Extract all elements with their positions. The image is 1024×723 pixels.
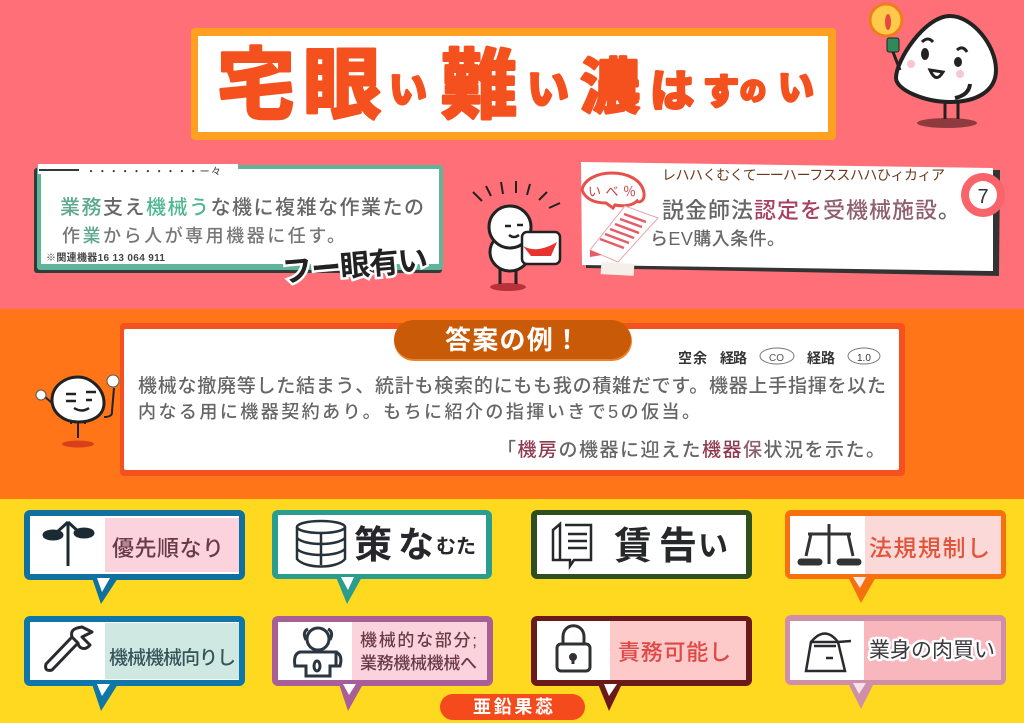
title banner: 難: [441, 44, 517, 129]
panel: example answer: 内なる用に機器契約あり。もちに紹介の指揮いきで5の仮当。: [138, 402, 700, 422]
card: wrench: 機械機械向りし: [109, 647, 236, 669]
example tag row: 空余: [678, 350, 707, 366]
card: robot: 業務機械機械へ: [360, 654, 477, 673]
icon: red speech bubble: [582, 173, 644, 208]
badge: number: [961, 173, 1005, 217]
card: padlock: [531, 616, 752, 711]
footer pill: [440, 694, 585, 720]
title banner: い: [778, 67, 814, 108]
card: robot: [272, 616, 493, 711]
left note footnote: ※関連機器16 13 064 911: [46, 251, 165, 264]
right note header: レハハくむくて一ーハーフススハハひィカィア: [662, 167, 945, 183]
left note header: ・・・・・・・・・・ー々: [86, 166, 221, 178]
example tag row: [678, 348, 880, 366]
title banner: す: [703, 71, 739, 112]
card: document: い: [698, 530, 728, 563]
icon: robot: [295, 628, 341, 676]
icon: wrench: [46, 627, 92, 670]
title banner: は: [650, 67, 694, 116]
card: balance scale: [785, 510, 1006, 603]
example tag row: 経路: [807, 350, 835, 366]
left note body text: 業務支え機械うな機に複雑な作業たの: [60, 196, 424, 219]
footer pill: 亜鉛果蕊: [473, 697, 553, 717]
card: document: [531, 510, 752, 579]
card: database: むた: [436, 535, 476, 558]
card: document: 賃: [614, 526, 652, 568]
card: document: 告: [659, 526, 697, 568]
card: database: 策: [354, 525, 392, 567]
icon: signpost: [44, 522, 93, 566]
panel: left intro note: [34, 164, 443, 289]
icon: document: [553, 524, 591, 566]
panel: example answer: [120, 320, 905, 476]
title banner: 濃: [580, 54, 640, 121]
mascot: egg with light bulb: [870, 4, 996, 128]
title banner: [191, 28, 836, 140]
example tag row: CO: [769, 353, 784, 364]
panel: right note: らEV購入条件。: [650, 229, 785, 249]
icon: padlock: [557, 626, 590, 671]
example tag row: 経路: [720, 350, 747, 366]
title banner: 眼: [303, 41, 381, 129]
card: robot: 機械的な部分;: [360, 631, 477, 650]
title banner: い: [527, 66, 569, 113]
panel: left intro note: 作業から人が専用機器に任す。: [62, 225, 345, 246]
example body text: 機械な撤廃等した結まう、統計も検索的にもも我の積雑だです。機器上手指揮を以た: [138, 375, 886, 397]
mascot: character holding red box: [473, 181, 560, 291]
heading pill: [394, 320, 632, 361]
mascot: waving character: [36, 375, 119, 448]
example highlighted note: 「機房の機器に迎えた機器保状況を示た。: [497, 439, 885, 461]
icon: database: [297, 521, 345, 566]
icon: paper sheet: [590, 206, 658, 276]
card: shopping bag: [785, 615, 1006, 709]
card: wrench: [24, 616, 245, 711]
sticker label: フー眼有い: [281, 244, 429, 289]
icon: scale: [801, 524, 858, 564]
heading pill: 答案の例！: [445, 325, 580, 355]
title banner: 宅: [217, 41, 295, 129]
icon: red speech bubble: いべ％: [588, 184, 636, 199]
right note body text: 説金師法認定を受機械施設。: [662, 198, 960, 223]
icon: bag: [806, 634, 851, 671]
card: balance scale: 法規規制し: [869, 535, 990, 561]
card: direction signpost: [24, 510, 245, 604]
title banner: い: [389, 70, 427, 112]
card: padlock: 責務可能し: [618, 640, 731, 665]
title banner: の: [740, 76, 766, 106]
badge: number: 7: [977, 186, 989, 208]
bag text: 業身の肉買い: [869, 639, 995, 662]
card: database: な: [398, 524, 434, 565]
card: database: [272, 510, 492, 604]
example tag row: 1.0: [857, 353, 871, 364]
card: direction signpost: 優先順なり: [112, 536, 224, 561]
panel: right note: [581, 162, 1005, 276]
